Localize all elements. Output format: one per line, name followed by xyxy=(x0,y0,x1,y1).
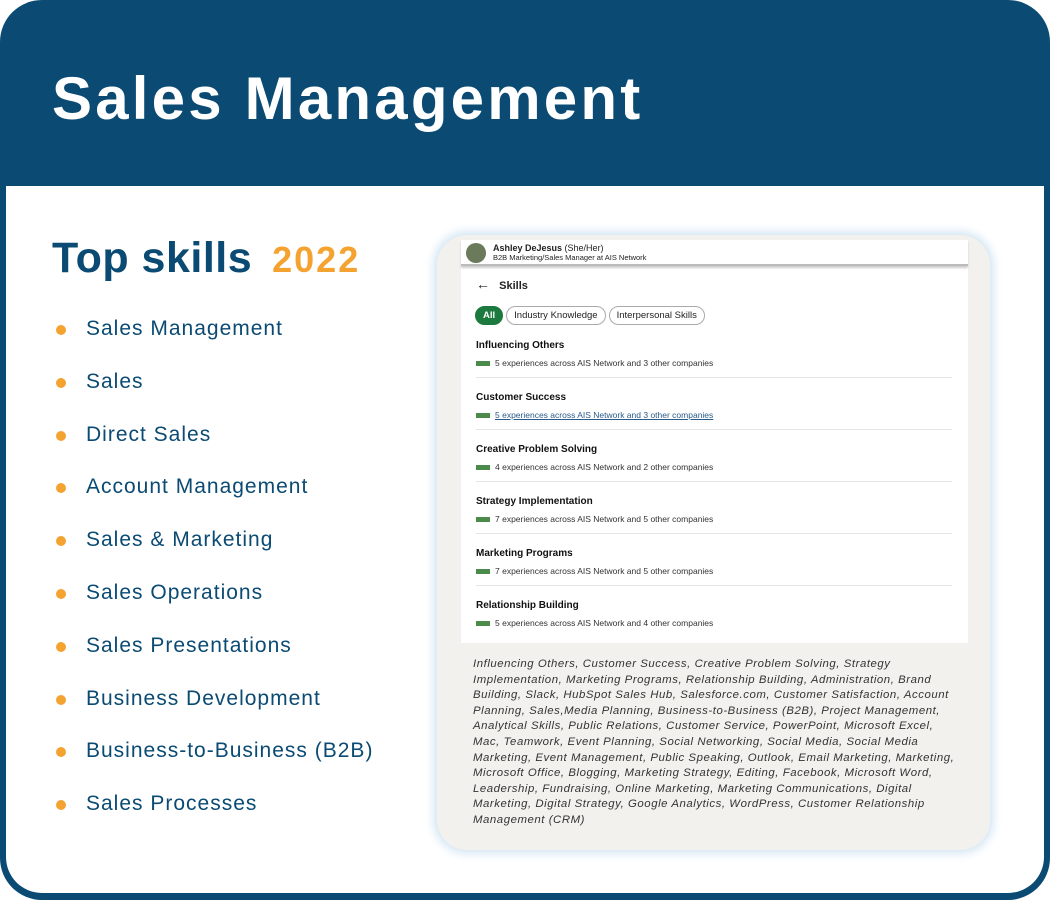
screenshot: skills: Ashley DeJesus (She/Her) xyxy=(493,243,604,253)
list: top skills xyxy=(56,317,373,815)
list: top skills: Sales Management xyxy=(86,317,283,340)
text: full skills list: Influencing Others, Customer Success, Creative Problem Solving, Strategy Implementation, Marketing Programs, Relationship Building, Administration, Brand Building, Slack, HubSpot Sales Hub, Salesforce.com, Customer Satisfaction, Account Planning, Sales,Media Planning, Business-to-Business (B2B), Project Management, Analytical Skills, Public Relations, Customer Service, PowerPoint, Microsoft Excel, Mac, Teamwork, Event Planning, Social Networking, Social Media, Social Media Marketing, Event Management, Public Speaking, Outlook, Email Marketing, Marketing, Microsoft Office, Blogging, Marketing Strategy, Editing, Facebook, Microsoft Word, Leadership, Fundraising, Online Marketing, Marketing Communications, Digital Marketing, Digital Strategy, Google Analytics, WordPress, Customer Relationship Management (CRM) xyxy=(473,658,954,826)
list: top skills: Sales & Marketing xyxy=(86,528,273,551)
list: top skills: Sales Presentations xyxy=(86,634,292,657)
screenshot: skills: ← Skills xyxy=(476,276,528,292)
screenshot: skills: Interpersonal Skills xyxy=(617,310,697,321)
screenshot: skills: 7 experiences across AIS Network and 5 other companies xyxy=(495,514,713,524)
title: Sales Management xyxy=(52,65,643,132)
screenshot: skills: All xyxy=(483,310,495,321)
screenshot: skills: B2B Marketing/Sales Manager at AIS Network xyxy=(493,253,646,262)
screenshot: skills: 7 experiences across AIS Network and 5 other companies xyxy=(495,566,713,576)
screenshot: skills: Relationship Building xyxy=(476,600,579,611)
screenshot: skills: 5 experiences across AIS Network and 3 other companies xyxy=(495,358,713,368)
list: top skills: Sales Processes xyxy=(86,792,257,815)
list: top skills: Direct Sales xyxy=(86,423,211,446)
screenshot: skills: Influencing Others xyxy=(476,340,564,351)
list: top skills: Sales Operations xyxy=(86,581,263,604)
list: top skills: Account Management xyxy=(86,475,308,498)
panel: profile skills card xyxy=(437,235,990,850)
screenshot: skills xyxy=(461,240,968,643)
screenshot: skills: 5 experiences across AIS Network and 4 other companies xyxy=(495,618,713,628)
screenshot: skills: Marketing Programs xyxy=(476,548,573,559)
screenshot: skills: Creative Problem Solving xyxy=(476,444,597,455)
screenshot: skills: 4 experiences across AIS Network and 2 other companies xyxy=(495,462,713,472)
list: top skills: Business-to-Business (B2B) xyxy=(86,739,373,762)
screenshot: skills: Industry Knowledge xyxy=(514,310,598,321)
heading: top skills 2022: Top skills 2022 xyxy=(52,234,360,282)
screenshot: skills: 5 experiences across AIS Network and 3 other companies xyxy=(495,410,713,420)
list: top skills: Sales xyxy=(86,370,144,393)
screenshot: skills: Strategy Implementation xyxy=(476,496,593,507)
screenshot: skills: Customer Success xyxy=(476,392,566,403)
list: top skills: Business Development xyxy=(86,687,321,710)
